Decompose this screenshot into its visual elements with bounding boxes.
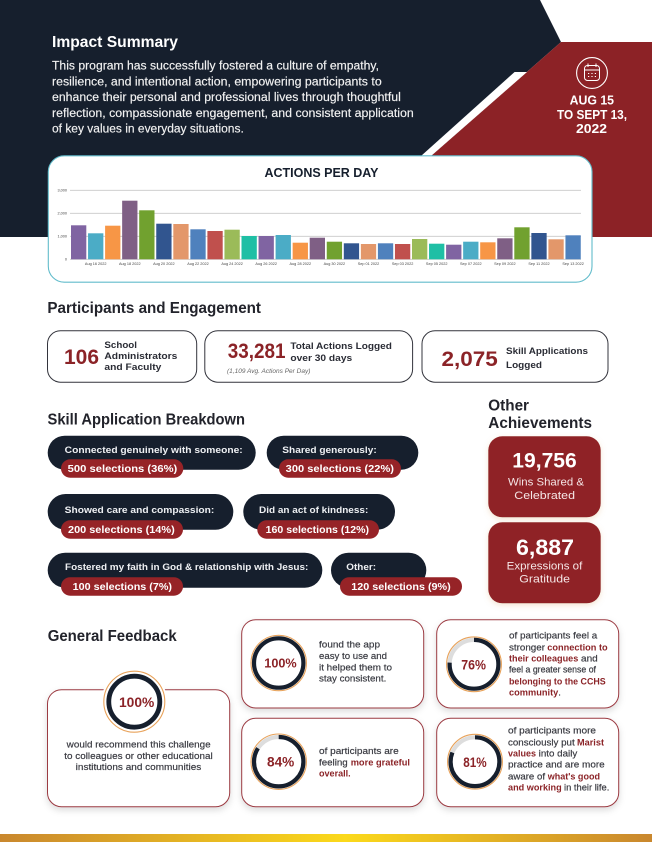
heading: general feedback: General Feedback — [48, 628, 177, 645]
feedback card: would recommend — [48, 669, 230, 807]
x axis date labels: Aug 18 2022 — [119, 262, 141, 266]
feedback text — [319, 640, 392, 685]
date block — [557, 58, 627, 136]
feedback text: their colleagues — [509, 654, 578, 664]
summary paragraph: resilience, and intentional action, empowering participants to — [52, 76, 382, 88]
stat label — [506, 346, 588, 371]
x axis date labels: Sep 11 2022 — [528, 262, 550, 266]
feedback text: consciously put — [508, 738, 575, 749]
stat number: 106 — [64, 345, 99, 369]
stat card: 106 administrators and faculty — [48, 331, 197, 382]
feedback card: more grateful: 84% — [267, 755, 294, 770]
feedback text: of participants feel a — [509, 631, 598, 642]
skill pill: shared generously: 300 selections (22%) — [286, 463, 394, 475]
icon: calendar — [577, 58, 607, 88]
progress ring: 100 percent — [104, 671, 165, 732]
feedback text — [509, 631, 608, 698]
skill pill: connected genuinely: 500 selections (36%) — [68, 463, 177, 475]
achievement card: expressions of gratitude: Expressions of — [507, 561, 583, 573]
progress ring: 76 percent — [447, 637, 501, 692]
achievement card: wins shared — [488, 436, 601, 517]
summary paragraph: enhance their personal and professional lives through thoughtful — [52, 92, 401, 104]
stat card: 33,281 total actions — [205, 331, 413, 382]
feedback text: community — [509, 687, 559, 697]
feedback text: of participants are — [319, 746, 399, 757]
heading: participants and engagement: Participants and Engagement — [47, 300, 261, 317]
stat label: School — [104, 340, 137, 351]
feedback text: feeling — [319, 758, 348, 769]
feedback text: to colleagues or other educational — [64, 751, 213, 762]
bars — [71, 201, 581, 259]
summary paragraph — [52, 60, 414, 136]
feedback text — [508, 726, 609, 794]
feedback text: practice and are more — [508, 760, 605, 771]
achievement card: wins shared: Wins Shared & — [508, 477, 585, 489]
x axis date labels: Aug 20 2022 — [153, 262, 175, 266]
feedback text: and — [581, 654, 598, 665]
progress ring: 84 percent — [251, 734, 306, 789]
heading: other achievements: Achievements — [488, 415, 592, 432]
impact summary text block — [52, 34, 414, 136]
date text — [557, 94, 627, 136]
skill pill: other: 120 selections (9%) — [351, 581, 451, 593]
feedback text — [319, 746, 410, 779]
y axis labels: 1,000 — [57, 234, 67, 238]
skill pill: other — [331, 553, 462, 596]
feedback text: in their life. — [564, 783, 609, 794]
skill pill: act of kindness: 160 selections (12%) — [266, 524, 369, 536]
x axis date labels: Sep 01 2022 — [358, 262, 379, 266]
stat label: and Faculty — [104, 362, 162, 373]
feedback card: marist values: 81% — [463, 755, 487, 770]
header background: dark panel — [0, 0, 561, 237]
feedback text: aware of — [508, 772, 545, 783]
skill pill: act of kindness — [243, 494, 395, 539]
summary paragraph: This program has successfully fostered a culture of empathy, — [52, 60, 379, 72]
feedback text: stay consistent. — [319, 674, 386, 685]
achievement card: expressions of gratitude — [488, 522, 601, 603]
feedback text: stronger — [509, 643, 545, 654]
skill pill: fostered faith: Fostered my faith in God & relationship with Jesus: — [65, 562, 308, 573]
feedback text: institutions and communities — [76, 762, 202, 773]
date text: 2022 — [576, 122, 607, 136]
heading: other achievements: Other — [488, 398, 529, 415]
feedback card: connection to colleagues — [437, 620, 619, 708]
feedback text: values — [508, 749, 536, 759]
y axis labels: 0 — [65, 258, 67, 262]
feedback text: Marist — [577, 738, 604, 748]
stat label: Logged — [506, 360, 542, 371]
x axis date labels: Sep 09 2022 — [494, 262, 516, 266]
skill pill: care and compassion — [48, 494, 233, 539]
x axis date labels: Aug 24 2022 — [221, 262, 243, 266]
summary paragraph: reflection, compassionate engagement, and consistent application — [52, 108, 414, 120]
x axis date labels: Aug 28 2022 — [290, 262, 311, 266]
skill pill: other: Other: — [346, 562, 376, 573]
date text: TO SEPT 13, — [557, 108, 627, 122]
skill pill: shared generously — [267, 436, 418, 478]
stat card: 2,075 skill applications — [422, 331, 608, 382]
y axis labels: 3,000 — [57, 188, 67, 192]
progress ring: 81 percent — [448, 734, 502, 789]
achievement card: expressions of gratitude: 6,887 — [516, 535, 574, 560]
x axis date labels: Aug 16 2022 — [85, 262, 106, 266]
skill pill: connected genuinely: Connected genuinely with someone: — [65, 445, 243, 456]
feedback text — [64, 740, 213, 773]
stat label: Administrators — [104, 351, 177, 362]
skill pill: fostered faith: 100 selections (7%) — [73, 581, 172, 593]
stat label: over 30 days — [290, 353, 352, 364]
feedback text: it helped them to — [319, 663, 392, 674]
x axis date labels: Sep 07 2022 — [460, 262, 482, 266]
average note: (1,109 Avg. Actions Per Day) — [227, 368, 310, 375]
feedback text: connection to — [547, 643, 608, 653]
achievement card: wins shared: 19,756 — [512, 449, 577, 473]
skill pill: care and compassion: 200 selections (14%) — [68, 524, 175, 536]
skill pill: shared generously: Shared generously: — [282, 445, 377, 456]
feedback card: more grateful — [242, 718, 424, 807]
x axis date labels: Sep 13 2022 — [562, 262, 584, 266]
feedback text: would recommend this challenge — [66, 740, 211, 751]
feedback card: app easy to use — [242, 620, 424, 708]
chart title: ACTIONS PER DAY — [264, 166, 379, 180]
header white diagonal stripe — [421, 72, 527, 156]
feedback card: app easy to use: 100% — [264, 656, 297, 671]
skill pill: care and compassion: Showed care and compassion: — [65, 505, 214, 516]
feedback text: and working — [508, 783, 562, 793]
feedback text: feel a greater sense of — [509, 665, 596, 676]
header background: red panel — [400, 42, 652, 237]
panel: actions per day chart — [48, 156, 592, 282]
stat label: Total Actions Logged — [290, 341, 392, 352]
feedback text: found the app — [319, 640, 380, 651]
stat number: 2,075 — [442, 347, 498, 371]
feedback text: overall. — [319, 769, 351, 779]
feedback text: . — [558, 687, 561, 698]
feedback text: more grateful — [351, 758, 410, 768]
feedback text: easy to use and — [319, 651, 387, 662]
stat label — [290, 341, 392, 364]
skill pill: connected genuinely — [48, 436, 256, 478]
y axis labels — [57, 188, 67, 262]
feedback text: what's good — [547, 772, 600, 782]
x axis date labels: Aug 30 2022 — [324, 262, 345, 266]
feedback card: marist values — [437, 718, 619, 807]
heading: impact summary: Impact Summary — [52, 34, 178, 51]
feedback text: belonging to the CCHS — [509, 677, 606, 687]
feedback card: would recommend: 100% — [119, 694, 155, 710]
stat number: 33,281 — [228, 339, 286, 363]
footer gold gradient bar — [0, 834, 652, 842]
x axis date labels: Aug 26 2022 — [255, 262, 277, 266]
x axis date labels: Sep 05 2022 — [426, 262, 447, 266]
feedback card: connection to colleagues: 76% — [461, 657, 486, 672]
skill pill: act of kindness: Did an act of kindness: — [259, 505, 368, 516]
x axis date labels: Aug 22 2022 — [187, 262, 209, 266]
summary paragraph: of key values in everyday situations. — [52, 124, 244, 136]
progress ring: 100 percent — [251, 635, 306, 691]
stat label: Skill Applications — [506, 346, 588, 357]
date text: AUG 15 — [570, 94, 614, 108]
y axis labels: 2,000 — [57, 212, 67, 216]
feedback text: into daily — [539, 749, 578, 760]
achievement card: expressions of gratitude: Gratitude — [519, 574, 570, 586]
stat label — [104, 340, 177, 373]
feedback text: of participants more — [508, 726, 596, 737]
skill pill: fostered faith — [48, 553, 322, 596]
achievement card: wins shared: Celebrated — [514, 490, 575, 502]
x axis date labels: Sep 03 2022 — [392, 262, 413, 266]
x axis date labels — [85, 262, 584, 266]
heading: skill application breakdown: Skill Application Breakdown — [48, 411, 245, 428]
heading: other achievements — [488, 398, 592, 432]
